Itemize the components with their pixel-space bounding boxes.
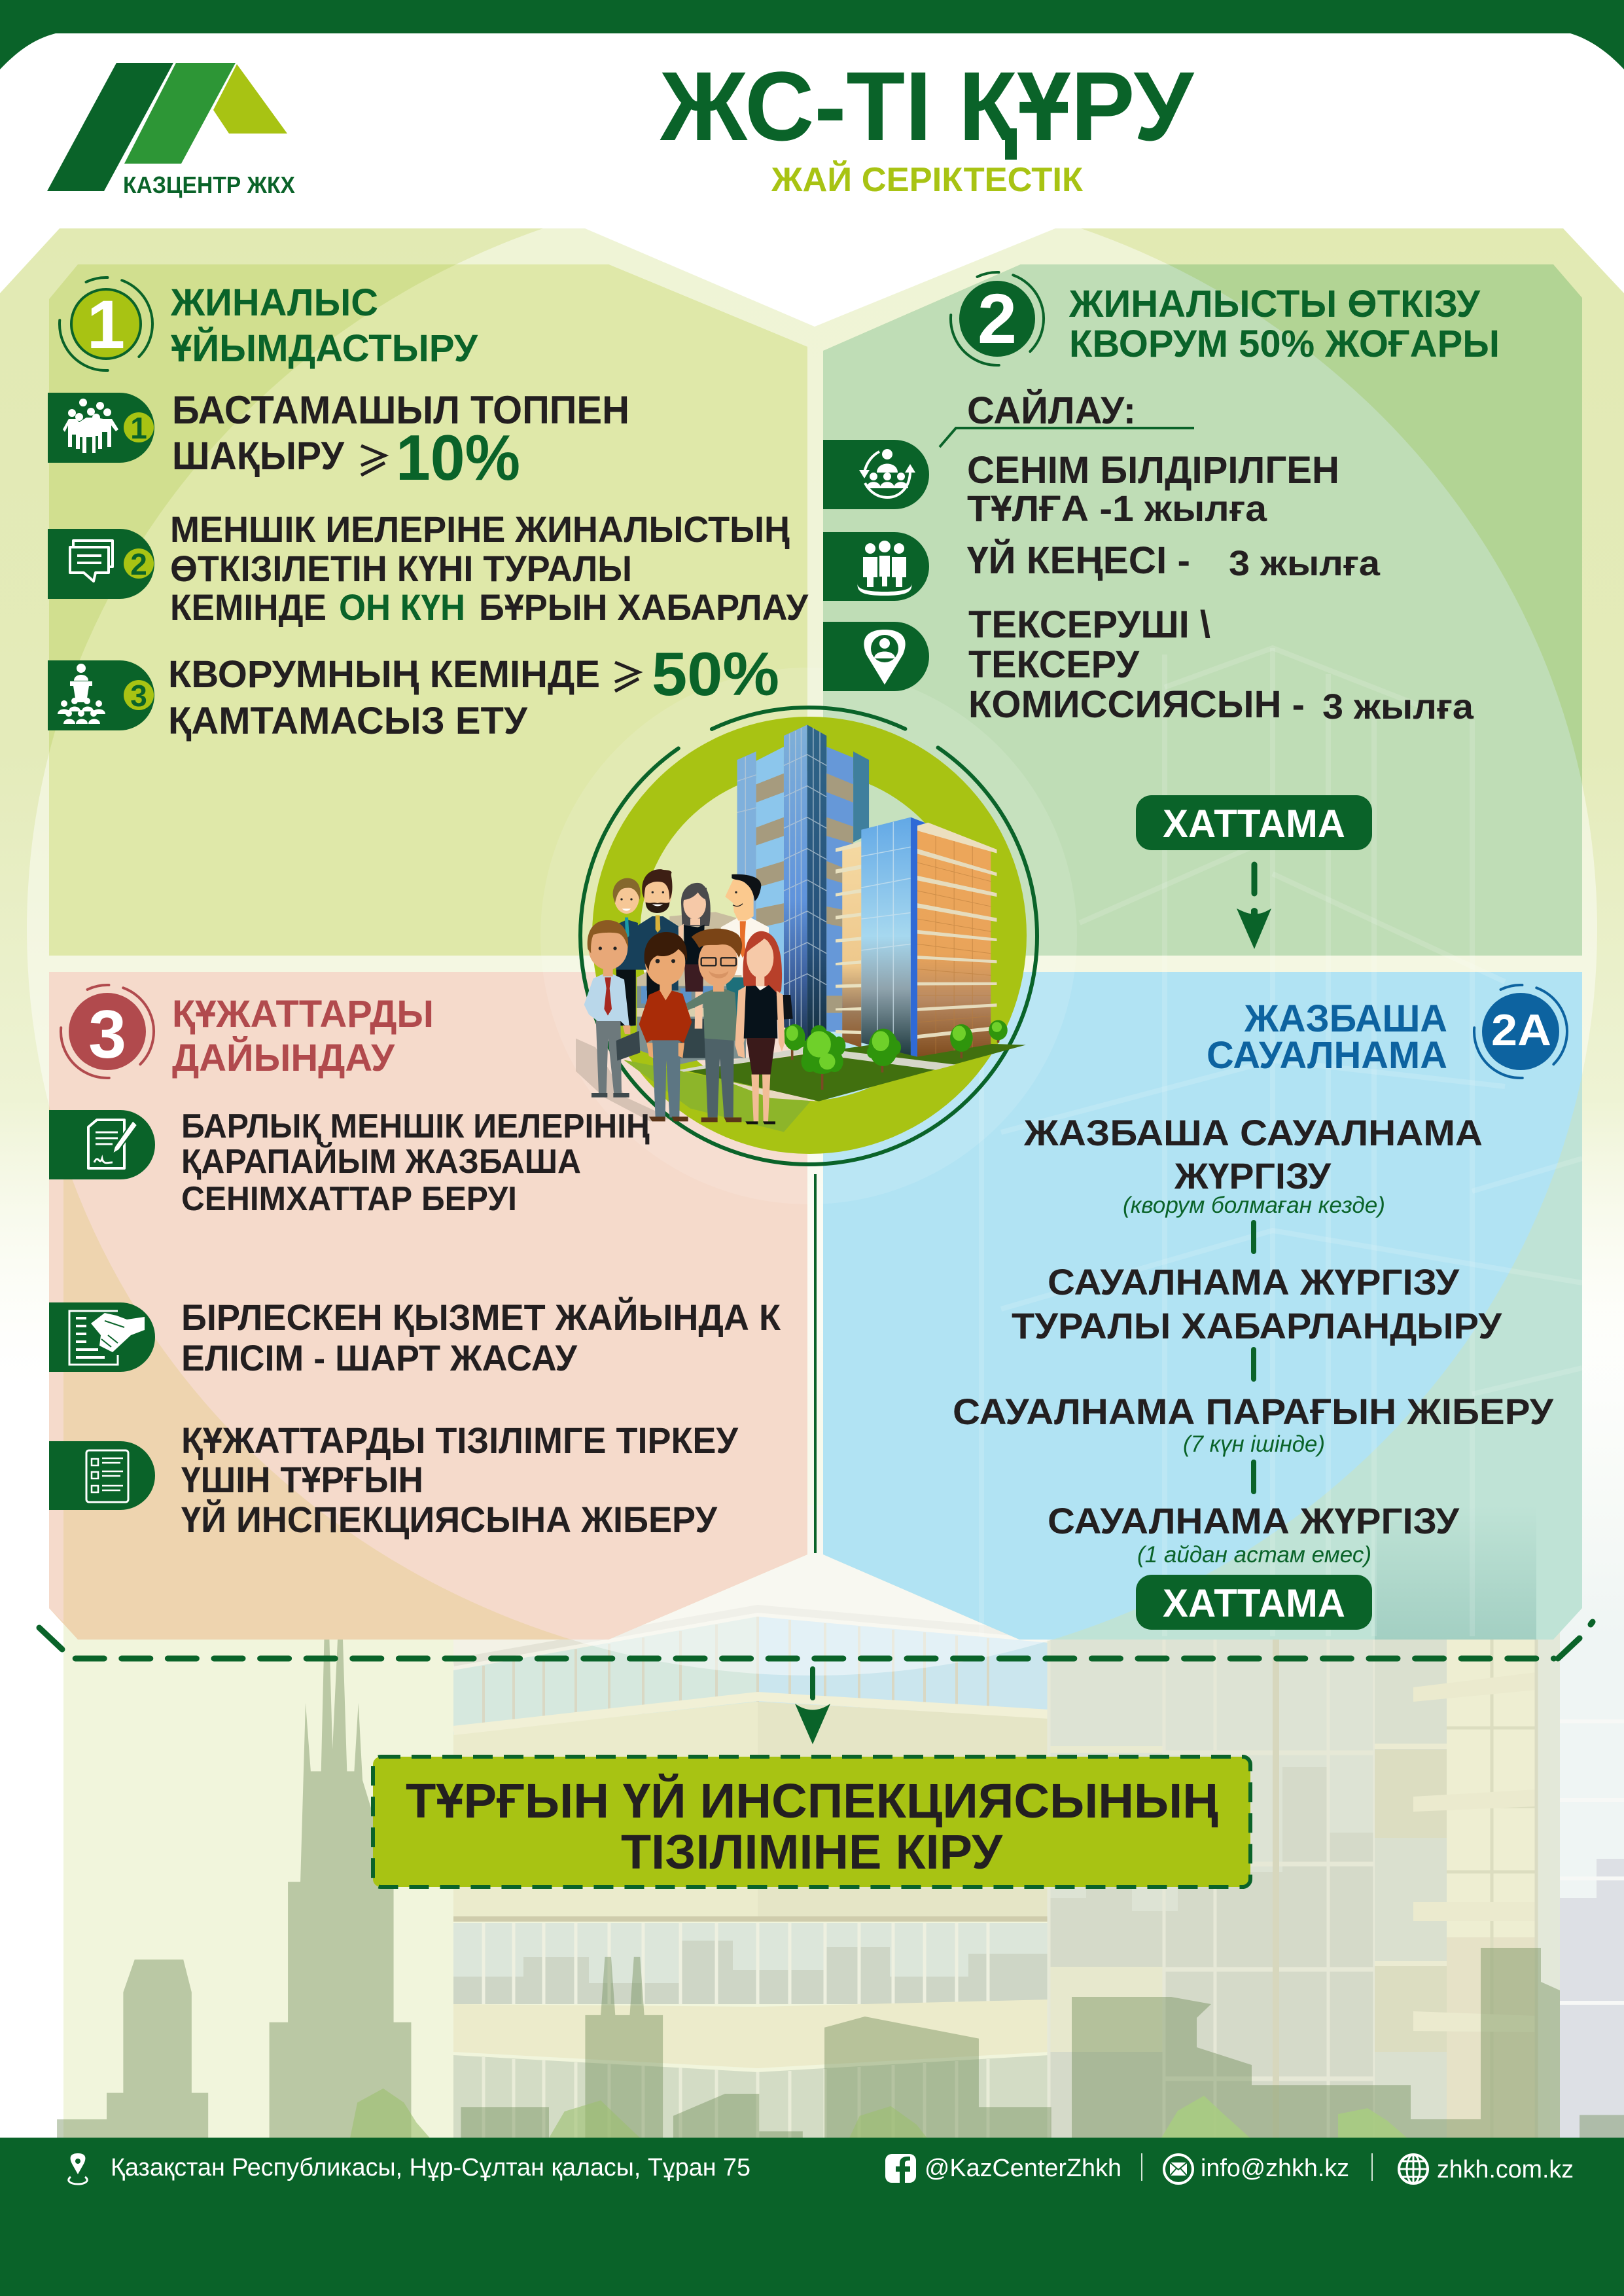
person back left	[613, 878, 641, 970]
section 3 heading: ҚҰЖАТТАРДЫ	[172, 993, 434, 1035]
item 1.2 text: ОН КҮН	[339, 586, 465, 628]
section 2A heading: ЖАЗБАША	[1244, 997, 1447, 1040]
outer hexagonal backdrop	[0, 228, 1624, 1391]
item tab 1.3: speaker and audience icon	[48, 660, 154, 730]
item 3.2 text: БІРЛЕСКЕН ҚЫЗМЕТ ЖАЙЫНДА К	[181, 1297, 781, 1338]
section 3 heading badge	[46, 970, 169, 1093]
connector 2	[1251, 1350, 1256, 1379]
skyline silhouettes	[57, 1639, 1624, 2138]
section 2A heading: САУАЛНАМА	[1207, 1034, 1447, 1077]
section 2A heading badge: 2A	[1491, 1005, 1551, 1055]
front man blue shirt with briefcase	[584, 920, 640, 1098]
section 2 heading: ЖИНАЛЫСТЫ ӨТКІЗУ	[1068, 283, 1481, 325]
item tab 2.3: auditor location pin icon	[823, 622, 929, 691]
connector 1	[1251, 1223, 1256, 1251]
final box: enter the housing inspectorate registry: ТІЗІЛІМІНЕ КІРУ	[621, 1825, 1003, 1879]
item 3.3 text	[181, 1420, 739, 1540]
item 1.2 text: ӨТКІЗІЛЕТІН КҮНІ ТУРАЛЫ	[170, 548, 632, 589]
section 2 heading	[1068, 283, 1500, 365]
survey step 3	[953, 1391, 1554, 1457]
dark green ring	[505, 632, 1112, 1240]
black bag	[772, 995, 793, 1020]
election label	[940, 389, 1194, 447]
item 2.3 text: ТЕКСЕРУШІ \	[968, 603, 1210, 646]
panel 2 background: holding the meeting	[823, 264, 1582, 956]
lobby behind people	[637, 977, 746, 1065]
right glass columns	[1051, 1640, 1373, 1911]
section 2 heading badge	[936, 257, 1059, 380]
item 1.2 text: КЕМІНДЕ	[170, 586, 327, 628]
survey step 1: ЖАЗБАША САУАЛНАМА	[1023, 1112, 1483, 1153]
section 1 heading: ҰЙЫМДАСТЫРУ	[171, 327, 478, 370]
item 2.3 text	[968, 603, 1474, 726]
protocol button top	[1136, 795, 1372, 850]
item 2.1 text	[967, 449, 1339, 529]
footer address: Қазақстан Республикасы, Нұр-Сұлтан қаласы, Тұран 75	[111, 2154, 750, 2181]
survey step 3: (7 күн ішінде)	[1183, 1431, 1325, 1457]
joined right silhouettes	[1072, 1948, 1560, 2138]
final box: enter the housing inspectorate registry: ТҰРҒЫН ҮЙ ИНСПЕКЦИЯСЫНЫҢ	[406, 1773, 1218, 1828]
survey step 4: САУАЛНАМА ЖҮРГІЗУ	[1048, 1500, 1460, 1541]
subtitle: ЖАЙ СЕРІКТЕСТІК	[771, 160, 1083, 199]
woman grey hair	[679, 883, 711, 1029]
item 1.3 text: КВОРУМНЫҢ КЕМІНДЕ	[168, 653, 600, 696]
teal pants behind	[725, 977, 748, 1036]
man in profile	[721, 874, 769, 990]
item 2.1 text: СЕНІМ БІЛДІРІЛГЕН	[967, 449, 1339, 492]
item 3.3 text: ҮЙ ИНСПЕКЦИЯСЫНА ЖІБЕРУ	[181, 1499, 718, 1540]
item 2.2 text: ҮЙ КЕҢЕСІ -	[967, 539, 1190, 582]
dashed collector line	[39, 1622, 1593, 1659]
survey step 3: САУАЛНАМА ПАРАҒЫН ЖІБЕРУ	[953, 1391, 1554, 1432]
vertical divider between lower panels	[814, 1174, 817, 1553]
notch roof zone	[453, 1640, 1047, 1670]
arrow down to registry	[795, 1669, 830, 1744]
footer website: zhkh.com.kz	[1437, 2156, 1574, 2183]
section 1 heading	[170, 281, 478, 370]
survey step 2: ТУРАЛЫ ХАБАРЛАНДЫРУ	[1012, 1305, 1502, 1346]
large translucent circle	[27, 183, 1597, 1676]
buildings	[624, 725, 1026, 1132]
item 2.2 text	[967, 539, 1381, 583]
item tab 2.1: rotating representative icon	[823, 440, 929, 509]
item 3.3 text: ҮШІН ТҰРҒЫН	[181, 1459, 423, 1500]
election label: САЙЛАУ:	[967, 389, 1136, 432]
man in red sweater	[639, 932, 692, 1121]
item 1.2 text: МЕНШІК ИЕЛЕРІНЕ ЖИНАЛЫСТЫҢ	[170, 509, 790, 550]
section 2 heading: КВОРУМ 50% ЖОҒАРЫ	[1069, 323, 1500, 365]
survey step 1	[1023, 1112, 1483, 1218]
footer email: info@zhkh.kz	[1201, 2155, 1349, 2182]
top green header bar	[0, 0, 1624, 69]
panel 2A background: written survey	[823, 972, 1582, 1640]
section 3 heading	[172, 993, 434, 1079]
section 3 heading: ДАЙЫНДАУ	[172, 1037, 395, 1079]
faint building showing through right panels	[981, 648, 1582, 1636]
item 2.3 text: 3 жылға	[1322, 687, 1474, 726]
survey step 1: ЖҮРГІЗУ	[1174, 1155, 1332, 1196]
survey step 1: (кворум болмаған кезде)	[1123, 1193, 1385, 1218]
section 2A heading	[1207, 997, 1447, 1077]
item 2.2 text: 3 жылға	[1229, 544, 1381, 583]
survey step 2	[1012, 1261, 1502, 1346]
person shadow	[576, 1039, 669, 1121]
item 3.3 text: ҚҰЖАТТАРДЫ ТІЗІЛІМГЕ ТІРКЕУ	[181, 1420, 739, 1461]
protocol button bottom: ХАТТАМА	[1163, 1581, 1345, 1625]
item 1.1 text	[172, 388, 629, 493]
item 2.1 text: ТҰЛҒА -1 жылға	[967, 488, 1267, 529]
section 1 heading: ЖИНАЛЫС	[170, 281, 378, 324]
item tab 3.2: handshake contract icon	[49, 1302, 155, 1372]
item 2.3 text: КОМИССИЯСЫН -	[968, 683, 1305, 726]
survey step 4	[1048, 1500, 1460, 1568]
item 3.2 text	[181, 1297, 781, 1378]
man with glasses	[686, 929, 742, 1122]
footer bar	[0, 2138, 1624, 2296]
item 1.2 text: БҰРЫН ХАБАРЛАУ	[479, 586, 809, 628]
connector 3	[1251, 1462, 1256, 1492]
section 1 heading badge	[44, 262, 168, 386]
arrow down from protocol	[1237, 865, 1271, 949]
item 3.1 text: СЕНІМХАТТАР БЕРУІ	[181, 1180, 517, 1218]
woman with red hair	[735, 931, 785, 1124]
item tab 1.1: initiative group icon	[48, 393, 154, 463]
logo: KazCenter ZhKH	[47, 63, 295, 198]
survey step 4: (1 айдан астам емес)	[1137, 1542, 1371, 1568]
item 3.1 text	[181, 1107, 650, 1218]
item tab 1.2: message icon: 2	[130, 547, 147, 581]
trees	[784, 1020, 1008, 1090]
final box: enter the housing inspectorate registry	[373, 1757, 1250, 1887]
protocol button top: ХАТТАМА	[1163, 802, 1345, 846]
title: ЖС-ТІ ҚҰРУ	[660, 51, 1195, 161]
item 1.1 text: 10%	[396, 422, 520, 493]
panel 3 background: preparing documents	[49, 972, 807, 1640]
item tab 1.1: initiative group icon: 1	[130, 411, 147, 445]
item 1.1 text: БАСТАМАШЫЛ ТОППЕН	[172, 388, 629, 432]
item 1.1 text: ШАҚЫРУ	[172, 434, 345, 478]
people group	[576, 869, 793, 1124]
item 3.2 text: ЕЛІСІМ - ШАРТ ЖАСАУ	[181, 1337, 578, 1378]
item 1.3 text: 50%	[652, 639, 779, 708]
item tab 2.2: council icon	[823, 532, 929, 601]
section 2A heading badge	[1459, 970, 1582, 1093]
protocol button bottom	[1136, 1575, 1372, 1630]
item 2.3 text: ТЕКСЕРУ	[968, 643, 1140, 686]
item 1.3 text	[168, 639, 779, 742]
skyline trees	[350, 2089, 927, 2138]
logo: KazCenter ZhKH: КАЗЦЕНТР ЖКХ	[123, 171, 295, 198]
section 1 heading badge: 1	[87, 287, 125, 363]
footer facebook: @KazCenterZhkh	[925, 2155, 1121, 2182]
item 3.1 text: БАРЛЫҚ МЕНШІК ИЕЛЕРІНІҢ	[181, 1107, 650, 1145]
item tab 1.3: speaker and audience icon: 3	[130, 679, 147, 713]
panel 1 background: meeting organisation	[49, 264, 807, 956]
item 1.3 text: ҚАМТАМАСЫЗ ЕТУ	[168, 700, 528, 742]
person with beard	[616, 869, 679, 1032]
item tab 1.2: message icon	[48, 529, 154, 599]
item 1.2 text	[170, 509, 809, 628]
centre illustration: ring, buildings and people	[505, 632, 1112, 1240]
section 3 heading badge: 3	[88, 997, 126, 1073]
item 3.1 text: ҚАРАПАЙЫМ ЖАЗБАША	[181, 1142, 581, 1181]
background: pale building and skyline	[57, 1322, 1624, 2138]
lime crescent circle	[592, 717, 1027, 1154]
item tab 3.3: checklist icon	[49, 1441, 155, 1510]
survey step 2: САУАЛНАМА ЖҮРГІЗУ	[1048, 1261, 1460, 1302]
soft veil over right columns	[1051, 1640, 1538, 2138]
section 2 heading badge: 2	[978, 279, 1017, 358]
item tab 3.1: signing icon	[49, 1110, 155, 1179]
